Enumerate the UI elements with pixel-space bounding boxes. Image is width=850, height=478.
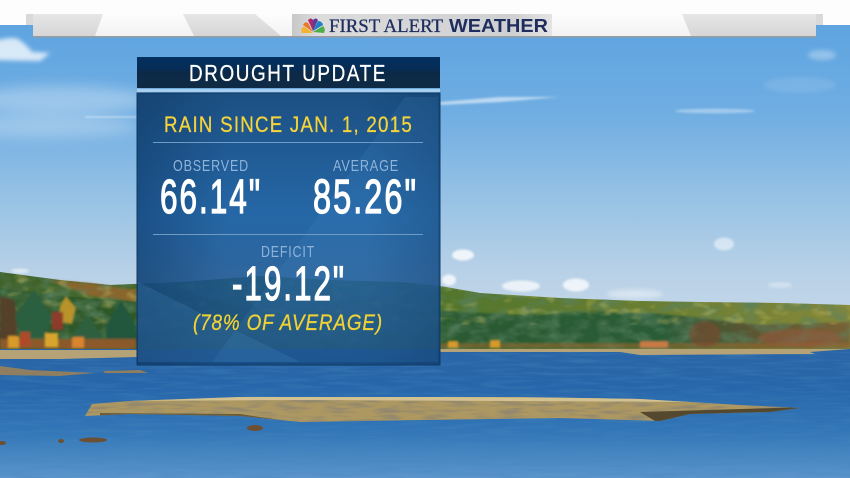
top banner: WEATHER [449, 16, 548, 36]
stat: average: 85.26" [313, 171, 418, 224]
shoreline sand [0, 349, 850, 359]
header accent line [137, 89, 440, 92]
small sandbar, left [0, 366, 148, 376]
forest texture [0, 270, 850, 350]
exposed island [85, 397, 800, 422]
autumn ridge, left [48, 280, 137, 302]
sky [0, 0, 850, 320]
panel: drought update [137, 57, 440, 365]
water [0, 349, 850, 478]
panel facets [212, 97, 438, 362]
stat: deficit: DEFICIT [261, 244, 315, 261]
logo wordmark: FIRST ALERT [329, 16, 443, 37]
panel title: DROUGHT UPDATE [189, 60, 387, 86]
panel header [137, 57, 440, 88]
subheading: RAIN SINCE JAN. 1, 2015 [164, 112, 413, 137]
icon: peacock logo [301, 18, 325, 33]
dark tree line [440, 311, 850, 348]
stat: average [313, 158, 418, 224]
white strip [0, 0, 850, 25]
stat: deficit: -19.12" [232, 258, 346, 311]
stat: deficit [232, 244, 346, 311]
banner bar [33, 14, 816, 36]
stat: observed [160, 158, 262, 224]
stat: observed: 66.14" [160, 171, 262, 224]
water ripples [0, 352, 850, 478]
stat: observed: OBSERVED [173, 158, 249, 175]
stat: average: AVERAGE [333, 158, 399, 175]
left forest [0, 288, 137, 349]
banner underline [33, 36, 816, 38]
fall colour, right shore [440, 321, 850, 348]
percent of average note: (78% OF AVERAGE) [193, 310, 383, 335]
banner edge shadows [26, 14, 33, 25]
far shore hill [0, 272, 850, 350]
clouds [0, 38, 836, 298]
top banner [0, 0, 850, 38]
fall trees, left [0, 290, 136, 349]
panel body [137, 93, 440, 365]
rocks [0, 425, 263, 445]
logo plate [292, 14, 552, 36]
banner shading [33, 14, 816, 36]
